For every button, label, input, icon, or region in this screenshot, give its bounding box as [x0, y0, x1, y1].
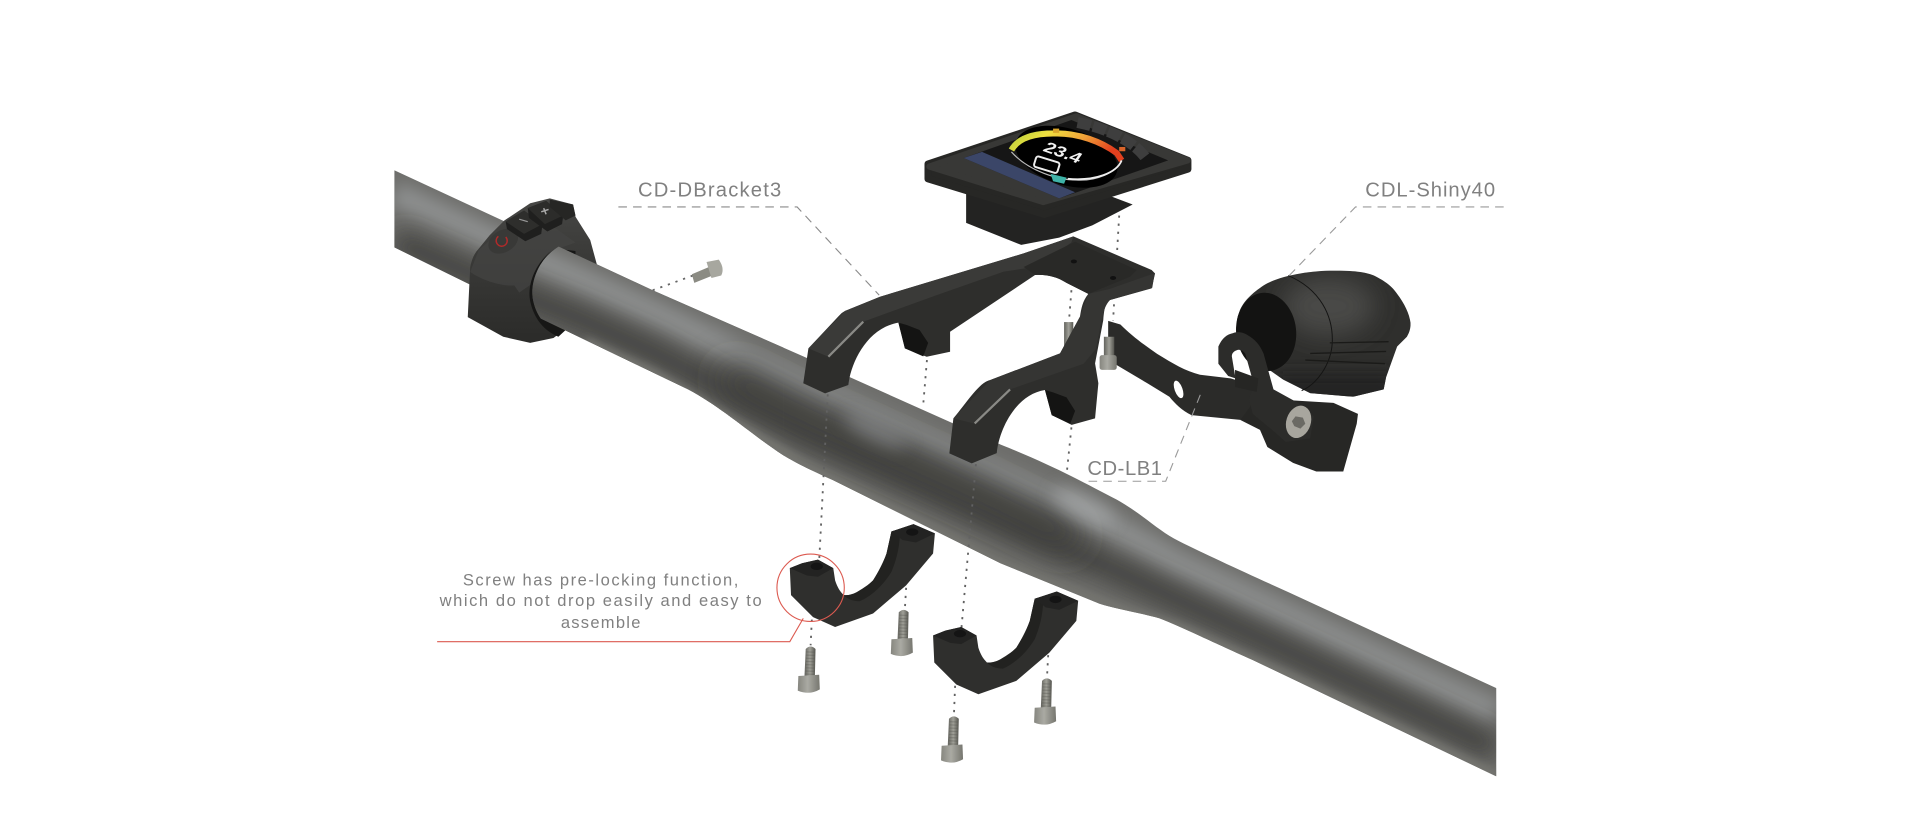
tube emerging from clamp	[532, 246, 784, 456]
callout text: Screw has pre-locking function,	[463, 570, 738, 589]
label: CDL-Shiny40: CDL-Shiny40	[1365, 180, 1495, 202]
callout: screw pre-locking	[437, 554, 844, 642]
back arm top face	[808, 236, 1073, 357]
lower clamp half: left	[790, 524, 935, 627]
lens	[1232, 290, 1300, 374]
display body side	[928, 115, 1188, 214]
screw and dotted line: clamp side	[653, 260, 723, 290]
bolt: rear left clamp	[891, 610, 913, 656]
blue status strip	[964, 152, 1075, 198]
bolt: rear right clamp	[1034, 678, 1056, 725]
power button	[484, 224, 523, 259]
callout text: which do not drop easily and easy to	[439, 591, 762, 610]
display base	[966, 184, 1133, 245]
plate pocket	[1024, 242, 1137, 294]
speed reading: 23.4	[1040, 139, 1086, 166]
handlebar switch clamp with buttons	[468, 198, 598, 343]
label: CD-LB1: CD-LB1	[1087, 458, 1162, 480]
label: CD-DBracket3	[618, 180, 879, 295]
bolt: lower right clamp	[941, 716, 963, 763]
exploded assembly diagram	[394, 112, 1504, 776]
bracket mounting screws	[1064, 322, 1117, 370]
light mount with hook and bolt	[1218, 332, 1358, 471]
label: CD-DBracket3: CD-DBracket3	[638, 180, 781, 202]
display bezel	[929, 116, 1188, 202]
speed gauge	[1008, 114, 1145, 199]
bolt	[1282, 402, 1315, 441]
callout text	[439, 570, 762, 632]
front arm top face	[953, 273, 1155, 424]
screen	[964, 120, 1168, 198]
dotted assembly lines	[811, 216, 1119, 716]
callout text: assemble	[561, 613, 640, 632]
light arm CD-LB1	[1108, 321, 1267, 422]
arm slots	[898, 323, 928, 356]
lower clamp half: right	[933, 591, 1078, 694]
bracket CD-DBracket3	[803, 236, 1155, 463]
bolt: lower left clamp	[798, 647, 820, 693]
arm hole	[1172, 379, 1185, 399]
control keys	[506, 200, 576, 241]
handlebar tube	[394, 170, 1496, 776]
headlight CDL-Shiny40	[1236, 270, 1411, 397]
label: CDL-Shiny40	[1286, 180, 1504, 279]
label: CD-LB1	[1087, 389, 1202, 481]
display unit	[928, 114, 1188, 245]
hook tab	[1235, 370, 1258, 392]
highlights on arm bevels	[828, 322, 863, 357]
